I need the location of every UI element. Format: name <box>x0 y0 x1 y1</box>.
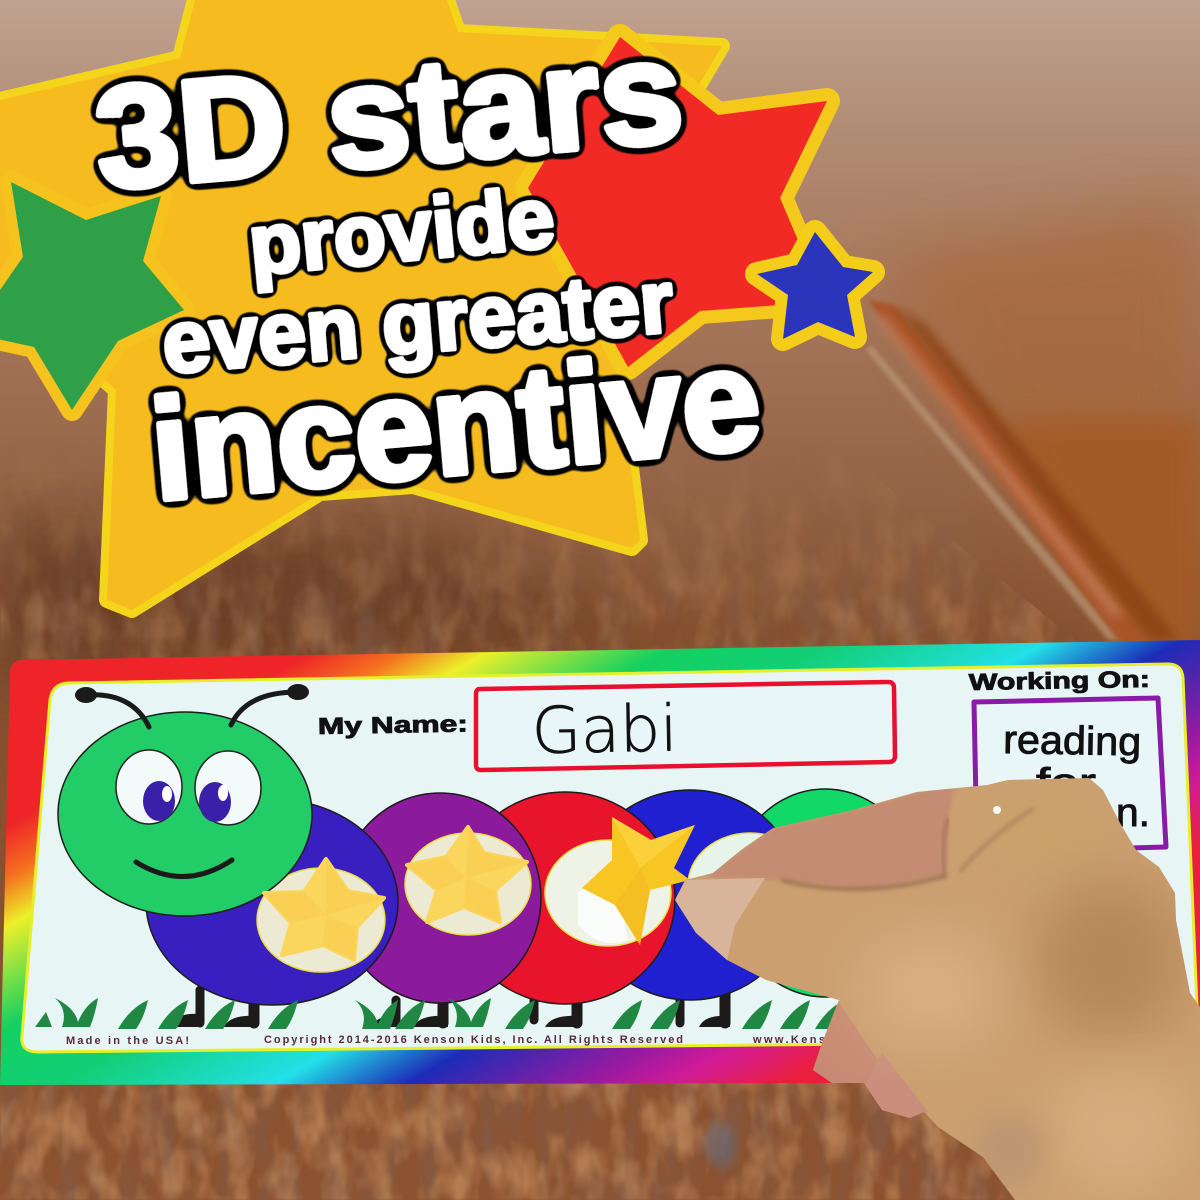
handwritten goal: n. <box>1116 791 1150 835</box>
large yellow star <box>0 0 722 610</box>
body segment: green <box>730 789 920 997</box>
label: Working On: Working On: <box>969 666 1150 695</box>
headline line: incentive: incentive <box>145 319 766 531</box>
hand <box>675 778 1200 1200</box>
red star <box>528 37 827 367</box>
foam pad <box>578 887 628 943</box>
antennae <box>75 684 309 727</box>
star space two <box>405 833 531 935</box>
handwritten goal <box>1003 718 1150 835</box>
legs <box>171 980 730 1027</box>
middle finger <box>813 998 878 1085</box>
label: My Name: My Name: <box>318 710 468 739</box>
knuckle crease <box>960 808 1034 872</box>
body segment: purple <box>339 793 541 1003</box>
handwritten goal: reading <box>1003 718 1142 764</box>
thumbnail <box>675 878 765 960</box>
3D star three <box>582 817 695 945</box>
star space four <box>688 833 812 937</box>
goal box <box>974 698 1166 852</box>
white card area <box>22 664 1198 1052</box>
knuckle tan <box>1034 778 1062 780</box>
skin highlight <box>993 806 1001 814</box>
body segment: red <box>455 792 675 1004</box>
handwritten name: Gabi <box>531 692 678 769</box>
chart card <box>0 640 1200 1085</box>
name box <box>476 682 895 770</box>
green star <box>0 182 184 410</box>
index finger <box>705 786 955 890</box>
headline <box>89 9 766 531</box>
footer: made in the USA: Made in the USA! <box>66 1035 189 1047</box>
thumb crease <box>781 876 945 889</box>
rainbow border <box>0 640 1200 1085</box>
handwritten goal: for <box>1036 761 1096 805</box>
footer: copyright: Copyright 2014-2016 Kenson Kids, Inc. All Rights Reserved <box>264 1034 683 1046</box>
blue star <box>757 232 873 339</box>
eyes <box>116 750 261 825</box>
star space one <box>257 868 385 972</box>
finger crease <box>943 817 948 878</box>
star space three <box>545 840 671 946</box>
wrist shade <box>979 1118 1045 1182</box>
body segment: indigo <box>146 799 398 1005</box>
headline line: 3D stars: 3D stars <box>89 9 689 220</box>
smile <box>136 860 232 877</box>
back of hand shadow <box>1035 880 1185 1040</box>
ring finger <box>866 1052 928 1118</box>
footer: website: www.Kens <box>752 1034 825 1046</box>
3D star one <box>264 859 384 960</box>
caterpillar <box>58 684 920 1027</box>
grass <box>35 998 845 1029</box>
headline line: even greater: even greater <box>158 251 677 392</box>
light area over thumb base <box>860 935 1000 1045</box>
headline line: provide: provide <box>245 170 558 294</box>
head <box>58 712 312 916</box>
3D star two <box>407 827 527 922</box>
body segment: blue <box>580 790 800 1000</box>
wrist light <box>1060 1070 1180 1184</box>
